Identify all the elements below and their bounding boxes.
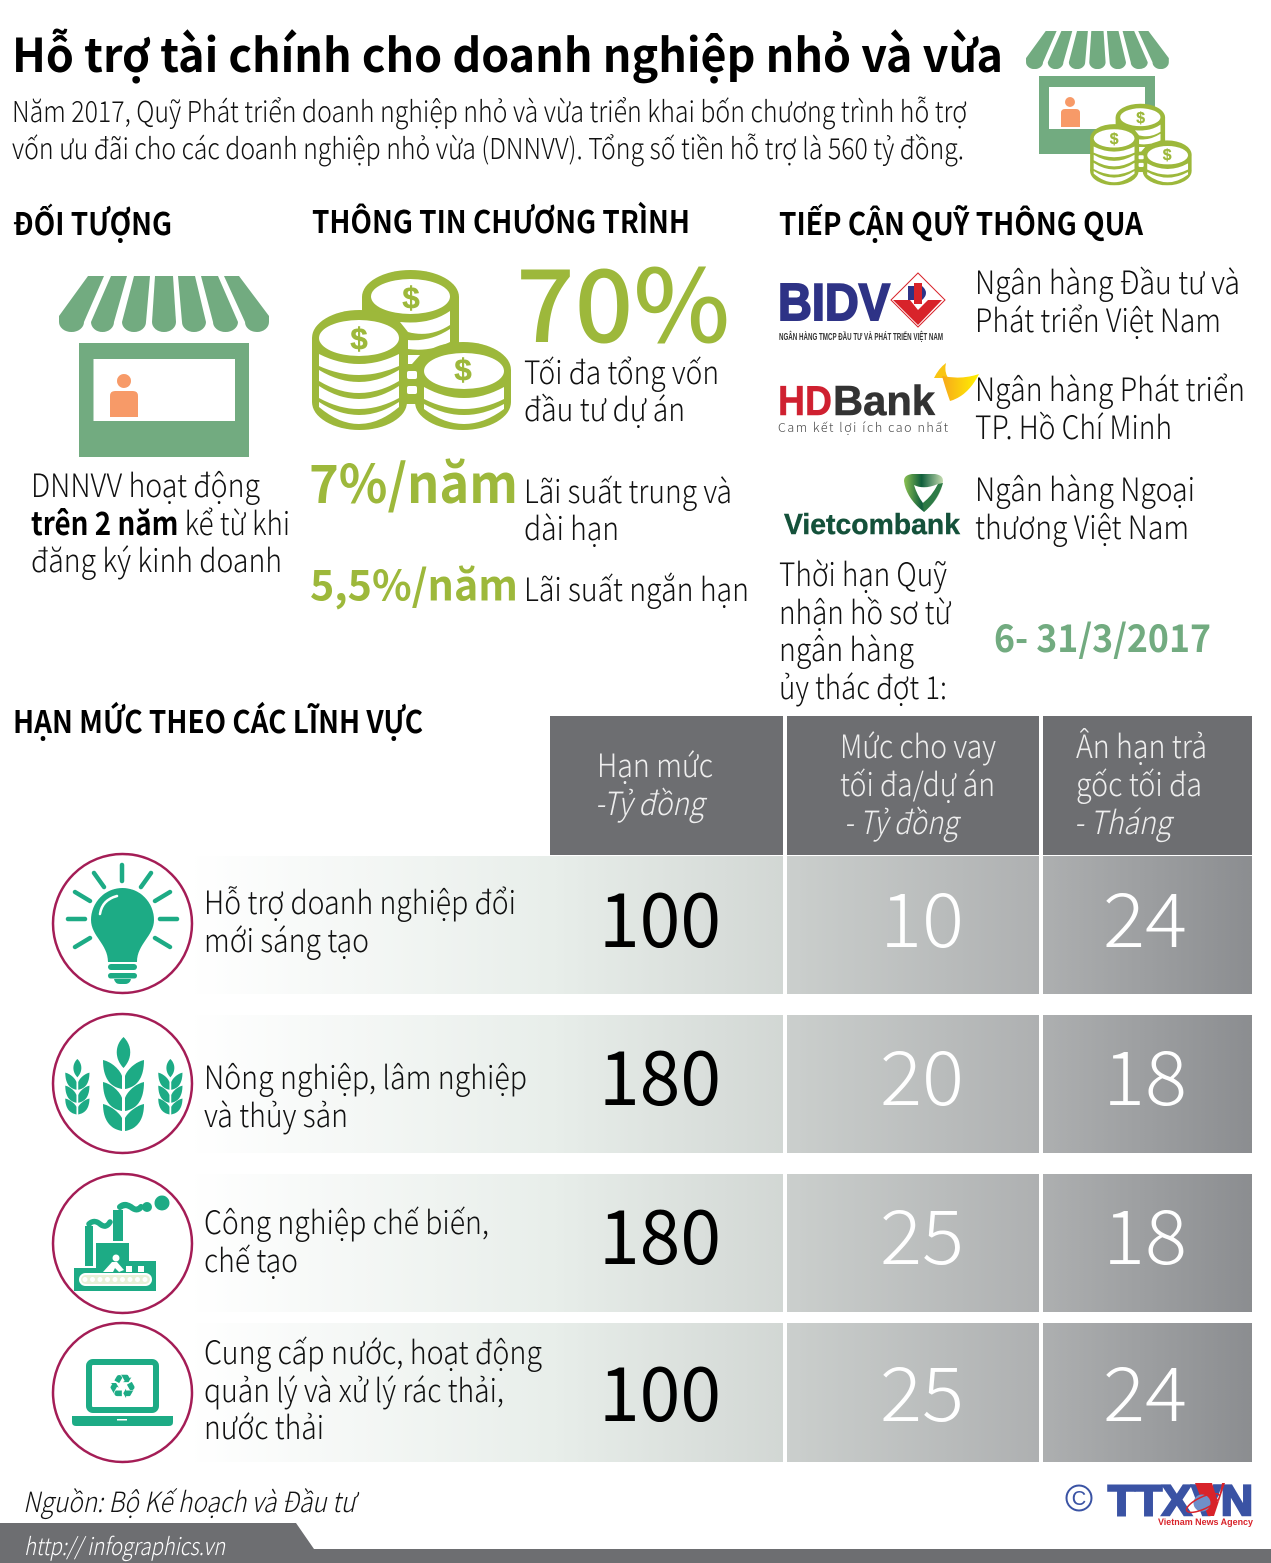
icon: wheat (53, 1014, 192, 1153)
target text: trên 2 năm kể từ khi (31, 499, 290, 545)
label (204, 1053, 527, 1137)
logo: Vietcombank: Vietcombank (784, 509, 961, 541)
text: HDBank (975, 365, 1245, 449)
stat: 70%: Tối đa tổng vốn (524, 348, 719, 394)
logo: BIDV (778, 273, 945, 343)
heading: thông tin chương trình: THÔNG TIN CHƯƠNG TRÌNH (312, 197, 690, 242)
table header: hạn mức: -Tỷ đồng (595, 779, 707, 825)
values: 180 (599, 1018, 721, 1127)
stat: 70%: 70% (516, 226, 730, 372)
icon: laptop recycle (53, 1323, 192, 1462)
label: Cung cấp nước, hoạt động (204, 1328, 542, 1374)
logo: HDBank: HD (778, 377, 832, 424)
heading: hạn mức theo các lĩnh vực: HẠN MỨC THEO CÁC LĨNH VỰC (13, 697, 423, 742)
deadline text: ngân hàng (779, 625, 914, 671)
target text: đăng ký kinh doanh (31, 536, 282, 582)
logo: HDBank (778, 363, 979, 436)
values: 25 (880, 1177, 964, 1286)
label: Công nghiệp chế biến, (204, 1198, 489, 1244)
target text (31, 461, 290, 582)
label: nước thải (204, 1403, 324, 1449)
deadline date: 6- 31/3/2017 (994, 608, 1211, 663)
icon: shop with coins (1026, 31, 1192, 185)
table header: hạn mức: Hạn mức (597, 741, 713, 787)
values: 20 (880, 1018, 964, 1127)
stat: 7%/năm: dài hạn (524, 504, 619, 550)
table header: ân hạn: gốc tối đa (1076, 760, 1202, 806)
deadline text: nhận hồ sơ từ (779, 588, 951, 634)
heading: đối tượng: ĐỐI TƯỢNG (13, 199, 172, 244)
row 3: công nghiệp (53, 1174, 1252, 1313)
text: Vietcombank (975, 465, 1195, 549)
icon: shop (59, 276, 269, 457)
stat: 70%: đầu tư dự án (524, 385, 685, 431)
label: quản lý và xử lý rác thải, (204, 1366, 504, 1412)
text: Vietcombank: Ngân hàng Ngoại (975, 465, 1195, 511)
values: 18 (1103, 1018, 1187, 1127)
icon: laptop recycle: ♻ (108, 1367, 137, 1406)
values (599, 860, 1187, 969)
table header: mức cho vay: tối đa/dự án (840, 760, 995, 806)
row 1: đổi mới sáng tạo (53, 854, 1252, 994)
row 2: nông nghiệp (53, 1014, 1252, 1153)
stat: 5,5%/năm (310, 552, 749, 614)
logo: BIDV: NGÂN HÀNG TMCP ĐẦU TƯ VÀ PHÁT TRIỂN VIỆT NAM (779, 330, 943, 343)
values: 24 (1103, 1334, 1187, 1443)
icon: factory (53, 1174, 192, 1313)
table header: ân hạn (1043, 716, 1252, 855)
table header: mức cho vay: Mức cho vay (840, 722, 996, 768)
values: 100 (599, 1334, 721, 1443)
deadline text: Thời hạn Quỹ (779, 550, 947, 596)
text: BIDV (975, 258, 1240, 342)
values (599, 1334, 1187, 1443)
title: Hỗ trợ tài chính cho doanh nghiệp nhỏ và vừa (12, 19, 1003, 86)
label: Nông nghiệp, lâm nghiệp (204, 1053, 527, 1099)
source: Nguồn: Bộ Kế hoạch và Đầu tư (23, 1481, 360, 1521)
icon: light bulb (53, 854, 192, 993)
target text: DNNVV hoạt động (31, 461, 260, 507)
stat: 70% (516, 226, 730, 431)
deadline text: ủy thác đợt 1: (779, 663, 947, 709)
values: 24 (1103, 860, 1187, 969)
values: 18 (1103, 1177, 1187, 1286)
logo: HDBank: Bank (833, 377, 936, 424)
values (599, 1018, 1187, 1127)
text: BIDV: Ngân hàng Đầu tư và (975, 258, 1240, 304)
intro text: vốn ưu đãi cho các doanh nghiệp nhỏ vừa (DNNVV). Tổng số tiền hỗ trợ là 560 tỷ đồng. (12, 126, 964, 168)
table header: ân hạn: - Tháng (1074, 798, 1174, 844)
logo: Vietcombank (784, 474, 961, 541)
text: Vietcombank: thương Việt Nam (975, 503, 1189, 549)
deadline text (779, 550, 951, 709)
stat: 5,5%/năm: 5,5%/năm (310, 552, 518, 614)
label (204, 1198, 489, 1282)
text: BIDV: Phát triển Việt Nam (975, 296, 1221, 342)
label (204, 878, 516, 962)
intro text (12, 89, 967, 168)
label: chế tạo (204, 1236, 298, 1282)
label (204, 1328, 542, 1449)
text: HDBank: Ngân hàng Phát triển (975, 365, 1245, 411)
label: mới sáng tạo (204, 916, 369, 962)
stat: 7%/năm: 7%/năm (309, 443, 518, 519)
text: HDBank: TP. Hồ Chí Minh (975, 403, 1172, 449)
values: 180 (599, 1177, 721, 1286)
table header: hạn mức (550, 716, 783, 855)
row 4: cung cấp nước (53, 1323, 1252, 1462)
logo: TTXVN: TTXVN (1108, 1477, 1253, 1525)
icon: coins (312, 270, 511, 430)
values: 100 (599, 860, 721, 969)
stat: 7%/năm: Lãi suất trung và (524, 467, 732, 513)
logo: TTXVN: C (1072, 1488, 1086, 1510)
footer bar: http:// infographics.vn (24, 1527, 226, 1562)
values (599, 1177, 1187, 1286)
values: 25 (880, 1334, 964, 1443)
footer bar (0, 1523, 1271, 1563)
logo: BIDV: BIDV (778, 274, 890, 332)
intro text: Năm 2017, Quỹ Phát triển doanh nghiệp nhỏ và vừa triển khai bốn chương trình hỗ trợ (12, 89, 967, 131)
values: 10 (880, 860, 964, 969)
logo: HDBank: Cam kết lợi ích cao nhất (778, 417, 949, 436)
table header: mức cho vay: - Tỷ đồng (844, 798, 961, 844)
table header: mức cho vay (787, 716, 1039, 855)
table header: ân hạn: Ân hạn trả (1076, 722, 1207, 768)
label: Hỗ trợ doanh nghiệp đổi (204, 878, 516, 924)
heading: tiếp cận quỹ thông qua: TIẾP CẬN QUỸ THÔNG QUA (779, 199, 1143, 244)
label: và thủy sản (204, 1091, 348, 1137)
stat: 5,5%/năm: Lãi suất ngắn hạn (524, 565, 749, 611)
logo: TTXVN: Vietnam News Agency (1158, 1517, 1254, 1528)
stat: 7%/năm (309, 443, 732, 550)
